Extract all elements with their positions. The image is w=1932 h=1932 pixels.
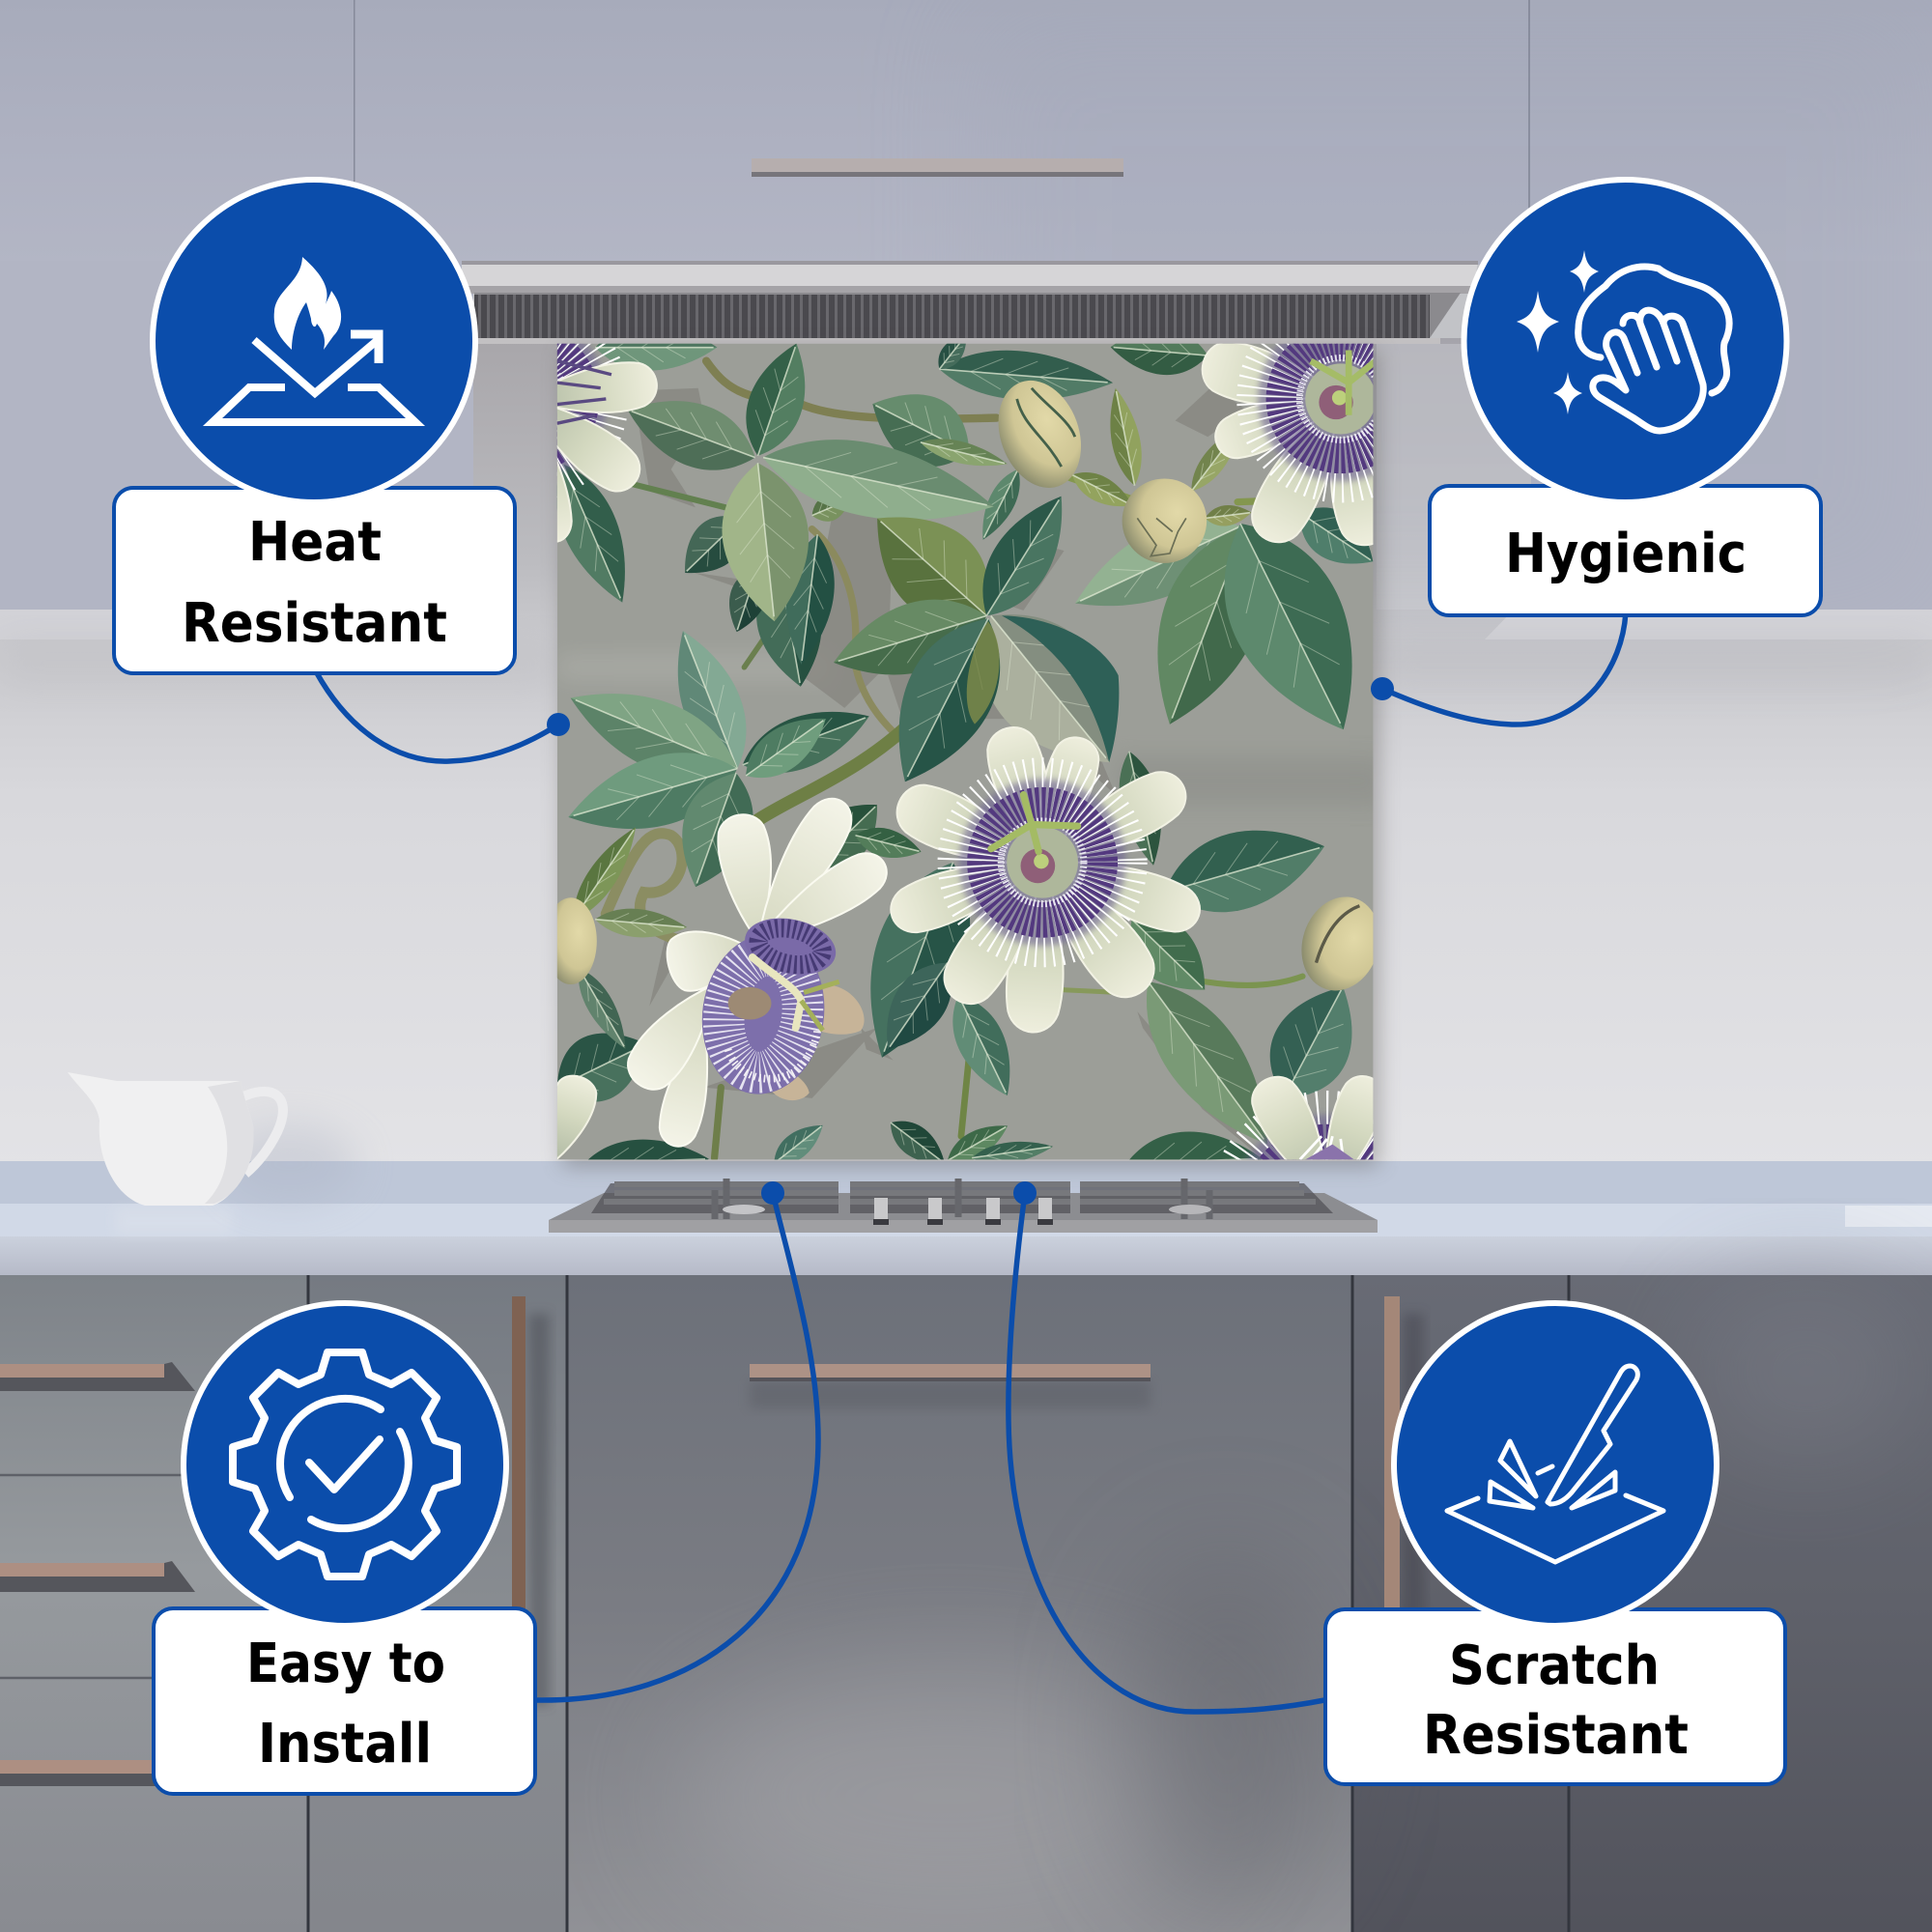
wall shade under lip [0, 639, 558, 688]
gas hob [549, 1179, 1378, 1233]
flower: bottom right [1223, 1075, 1374, 1159]
badge circle [1394, 1303, 1717, 1626]
drawer handles [0, 1362, 195, 1786]
leaves [538, 324, 1393, 1193]
label text [182, 511, 447, 655]
callout: hygienic [1430, 180, 1821, 615]
vines [606, 361, 1302, 1158]
buds and sepals [545, 369, 1391, 1001]
top cabinet handle [752, 158, 1123, 177]
label box [114, 488, 515, 673]
label text: Heat [248, 511, 382, 574]
connector: hygienic [1371, 611, 1626, 724]
label box [1430, 486, 1821, 615]
callout: scratch resistant [1325, 1303, 1785, 1784]
label text: Install [258, 1713, 432, 1776]
teapot [68, 1072, 357, 1206]
label text: Resistant [182, 592, 447, 655]
flower: left top [556, 344, 658, 543]
flower: top right [1202, 344, 1374, 547]
label text: Resistant [1423, 1704, 1689, 1767]
cabinet lip [0, 610, 1932, 639]
flower: side bloom [618, 789, 895, 1151]
label text [246, 1633, 445, 1776]
flower: centre open bloom [884, 722, 1207, 1034]
floral splashback panel [551, 340, 1390, 1177]
lower cabinets [0, 1275, 1932, 1932]
label text [1423, 1634, 1689, 1767]
callout: heat resistant [114, 180, 515, 673]
label box [154, 1608, 535, 1794]
icon: knife scratching a surface [1447, 1366, 1663, 1562]
wall [0, 338, 1932, 1169]
label text: Scratch [1449, 1634, 1660, 1697]
connector: scratch resistant [1009, 1181, 1324, 1712]
connector: easy to install [537, 1181, 818, 1700]
badge circle [1464, 180, 1787, 502]
panel reflections and shadows [557, 385, 1386, 1158]
label text: Hygienic [1505, 523, 1747, 585]
centre handle [750, 1364, 1151, 1408]
badge circle [153, 180, 475, 502]
badge circle [184, 1303, 506, 1626]
upper cabinets [0, 0, 1932, 688]
label text: Easy to [246, 1633, 445, 1695]
countertop [0, 1161, 1932, 1275]
flower: bottom left [556, 1074, 597, 1159]
icon: hand wiping with sparkles [1517, 250, 1729, 431]
label box [1325, 1609, 1785, 1784]
callout: easy to install [154, 1303, 535, 1794]
connector: heat resistant [316, 671, 570, 761]
vertical handles [512, 1296, 1424, 1705]
icon: flame and reflecting arrow [213, 257, 415, 422]
icon: gear with check [233, 1352, 457, 1577]
cooker hood [462, 261, 1478, 344]
